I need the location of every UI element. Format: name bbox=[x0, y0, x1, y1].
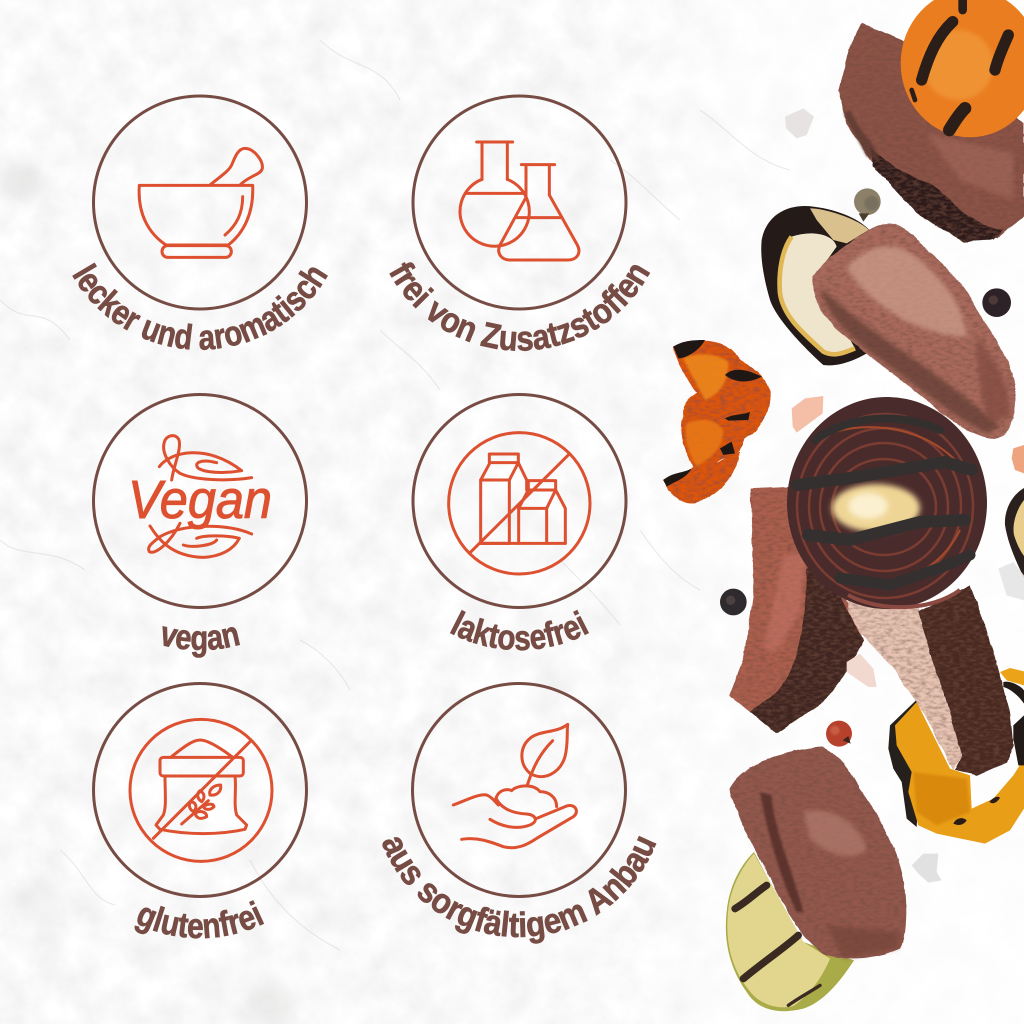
charred orange pepper bbox=[663, 340, 770, 503]
food: grilled meat and vegetables bbox=[663, 0, 1024, 1011]
peppercorns bbox=[854, 188, 1011, 317]
badge ring bbox=[94, 394, 306, 608]
grilled steak middle bbox=[813, 224, 1016, 438]
yellow bell pepper bbox=[888, 668, 1024, 844]
panel: frei von Zusatzstoffen bbox=[389, 94, 650, 352]
pink salt crystals bbox=[792, 396, 1024, 473]
small roasted onion at right edge bbox=[1005, 488, 1024, 578]
lower left steak bbox=[729, 487, 864, 734]
label: vegan bbox=[162, 626, 240, 658]
badge ring bbox=[94, 684, 306, 896]
lower right steak with pale cut bbox=[848, 585, 1013, 775]
label: aus sorgfältigem Anbau bbox=[382, 836, 656, 944]
panel: glutenfrei bbox=[92, 682, 308, 939]
label: lecker und aromatisch bbox=[72, 262, 328, 350]
icon: mortar and pestle bbox=[139, 148, 262, 257]
label: glutenfrei bbox=[134, 900, 264, 939]
leaf flourishes bbox=[149, 436, 252, 557]
label: laktosefrei bbox=[450, 610, 589, 651]
grilled steak bottom bbox=[730, 747, 906, 959]
roasted red onion bbox=[787, 397, 987, 609]
icon: crossed-out flour sack bbox=[130, 719, 272, 861]
grilled steak top bbox=[838, 23, 1024, 242]
icon: crossed-out milk cartons bbox=[449, 433, 590, 574]
icon: hand with seedling bbox=[453, 724, 576, 848]
label: frei von Zusatzstoffen bbox=[389, 262, 650, 352]
badge ring bbox=[413, 96, 626, 309]
icon: vegan script logo bbox=[128, 436, 272, 557]
badge ring bbox=[413, 394, 626, 608]
icon: lab flasks bbox=[460, 142, 579, 260]
grey salt crystal top bbox=[785, 108, 814, 138]
grilled apple slice bbox=[726, 852, 854, 1011]
pale salt crystals bbox=[847, 562, 1024, 883]
panel: lecker und aromatisch bbox=[72, 94, 328, 350]
panel: aus sorgfältigem Anbau bbox=[382, 682, 656, 944]
dark peppercorn bbox=[720, 589, 747, 615]
badge ring bbox=[412, 684, 626, 896]
grilled sweet potato bbox=[901, 0, 1024, 137]
roasted onion wedge bbox=[761, 206, 869, 365]
badge ring bbox=[94, 96, 306, 309]
panel: vegan bbox=[92, 393, 308, 658]
panel: laktosefrei bbox=[412, 393, 628, 651]
red peppercorn bbox=[826, 721, 852, 747]
script word: Vegan bbox=[128, 470, 272, 530]
